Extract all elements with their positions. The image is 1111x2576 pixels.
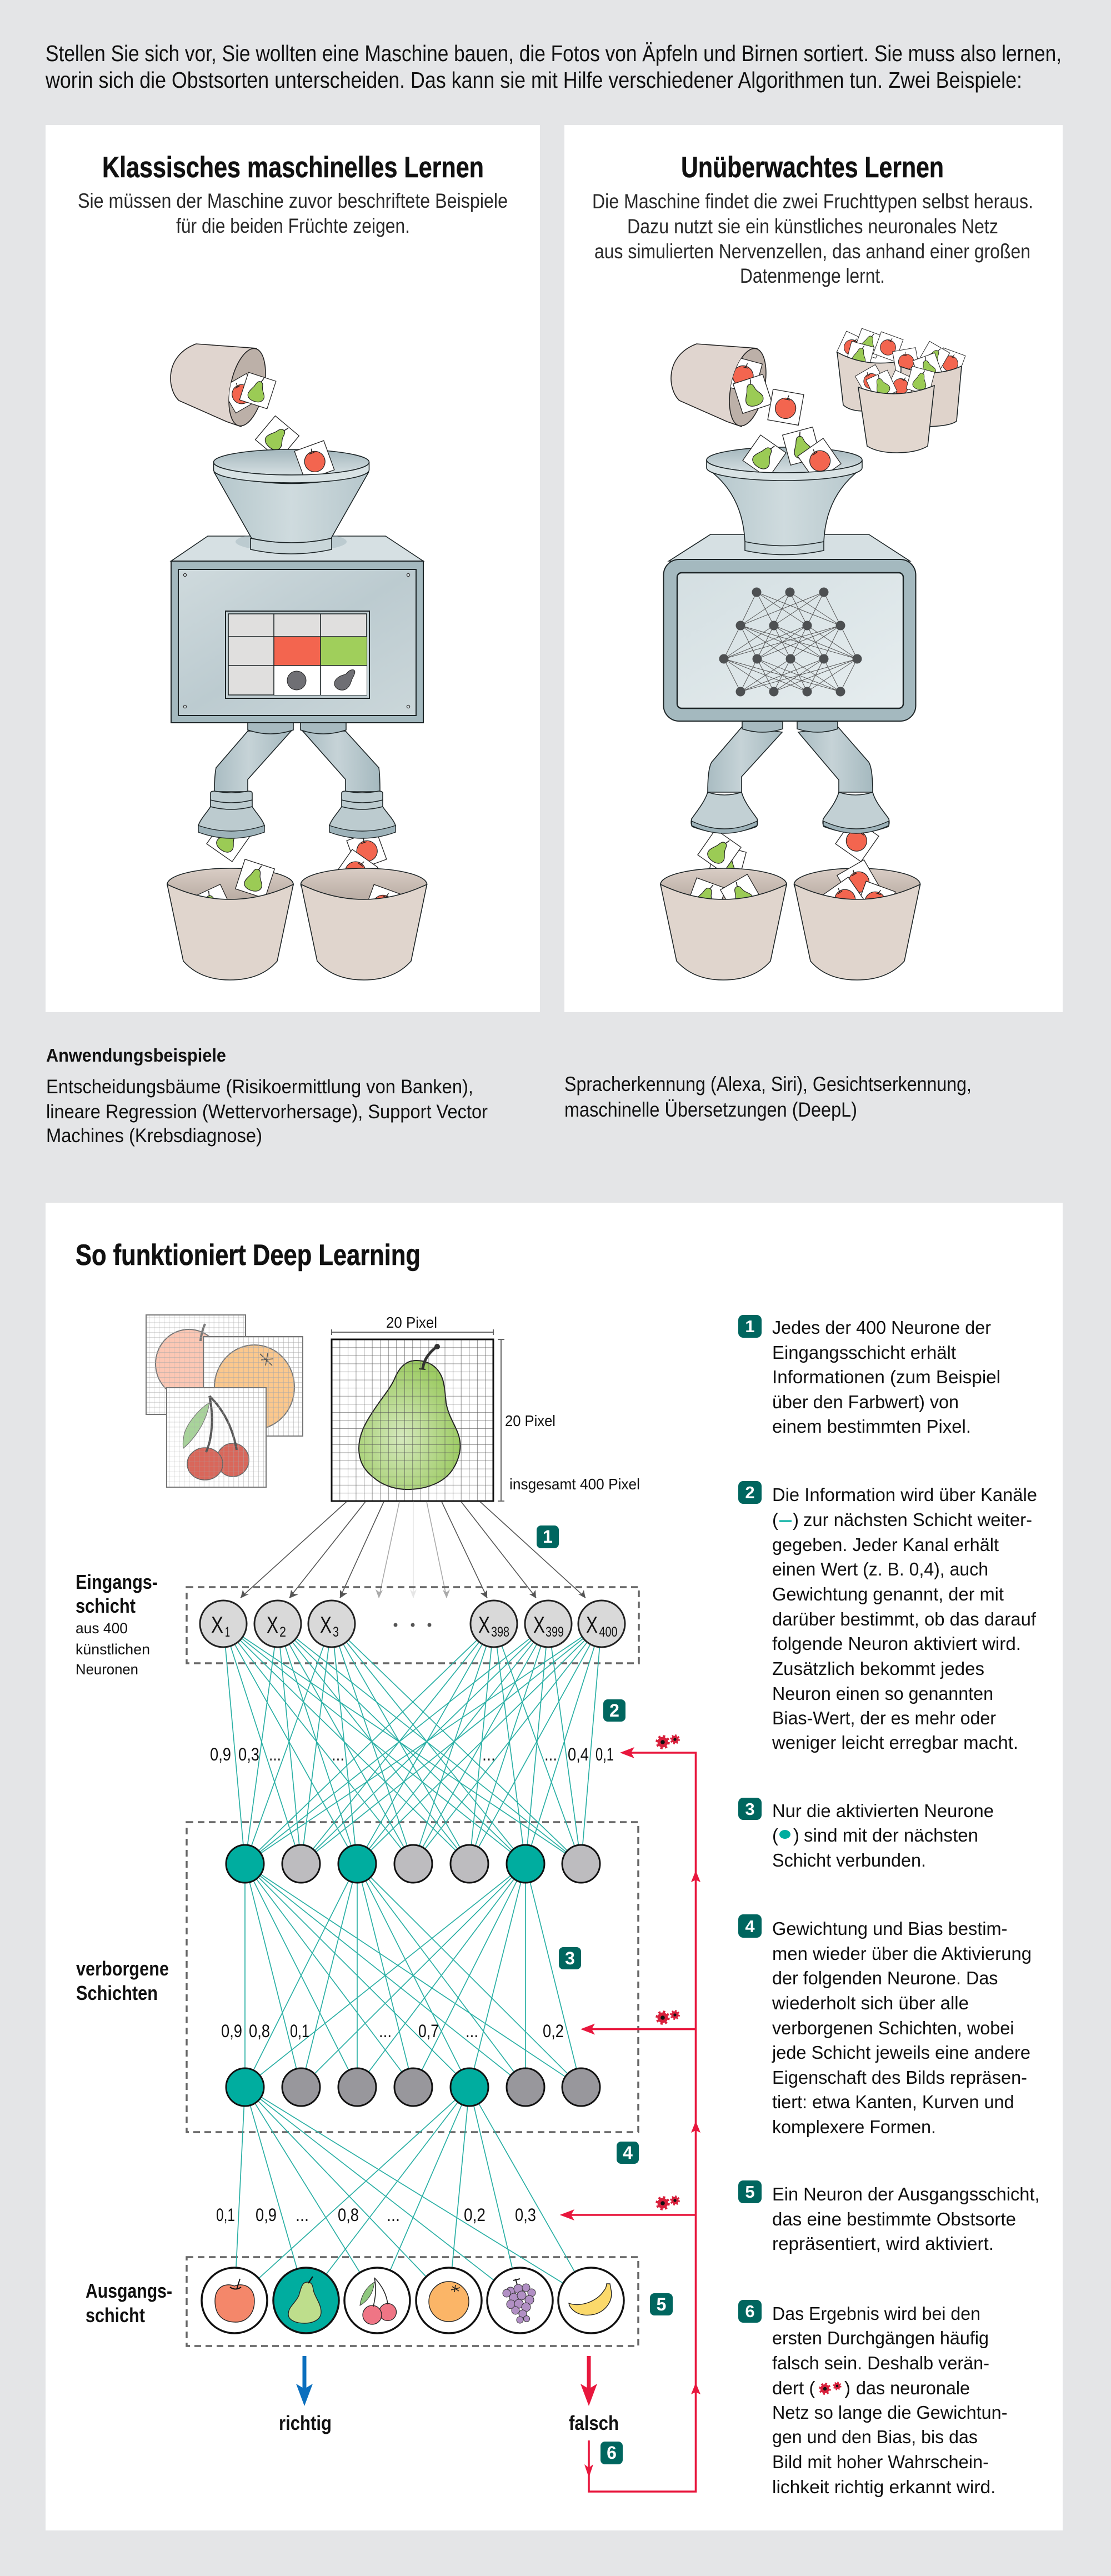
input neurons: 400 — [599, 1624, 618, 1640]
panel: klassisches maschinelles Lernen — [46, 125, 540, 1012]
step 1 text: 1 — [745, 1317, 755, 1336]
weights row 1: ... — [269, 1744, 281, 1764]
image: cherries pixel card — [167, 1388, 266, 1487]
dashed box: input layer — [187, 1587, 639, 1663]
step 3 text: ( — [772, 1825, 778, 1845]
weights row 2: 0,1 — [290, 2021, 309, 2041]
icon: left pipe — [691, 722, 783, 882]
arrow: falsch: falsch — [569, 2412, 619, 2434]
weights row 3: 0,3 — [515, 2205, 536, 2225]
badge 6 diagram — [600, 2442, 623, 2464]
step 3 text: Schicht verbunden. — [772, 1850, 926, 1870]
description: unsupervised learning: Dazu nutzt sie ein künstliches neuronales Netz — [627, 215, 998, 238]
heading: klassisches maschinelles Lernen: Klassisches maschinelles Lernen — [102, 151, 484, 184]
text block: Anwendungsbeispiele classical: Entscheidungsbäume (Risikoermittlung von Banken), — [46, 1076, 473, 1098]
icon: left bucket with pears — [660, 868, 787, 980]
input neurons — [200, 1600, 625, 1647]
icon: gears row 1 — [657, 1735, 679, 1748]
text block: Anwendungsbeispiele unsupervised: Spracherkennung (Alexa, Siri), Gesichtserkennung, — [564, 1073, 972, 1096]
description: classical learning — [78, 189, 508, 237]
step 2 text: 2 — [745, 1483, 755, 1502]
weights row 3: 0,8 — [338, 2205, 359, 2225]
label: verborgene Schichten: Schichten — [76, 1982, 158, 2004]
input neurons: X — [267, 1612, 278, 1638]
input neurons: X — [320, 1612, 332, 1638]
badge 5 diagram: 5 — [657, 2294, 666, 2314]
step 4 text: verborgenen Schichten, wobei — [772, 2018, 1014, 2038]
icon: three full buckets — [837, 328, 965, 453]
icon: falling apple photo — [768, 389, 804, 425]
step 6 text: ) — [844, 2378, 850, 2398]
badge 4 diagram: 4 — [623, 2143, 633, 2163]
badge 3 diagram: 3 — [565, 1948, 575, 1968]
step 6 text: Bild mit hoher Wahrschein- — [772, 2452, 989, 2472]
connections: hidden to output — [234, 2087, 591, 2300]
input neurons: X — [478, 1612, 490, 1638]
step 2 text: Neuron einen so genannten — [772, 1683, 993, 1704]
step 6 text: das neuronale — [856, 2378, 970, 2398]
step 2 text: zur nächsten Schicht weiter- — [803, 1509, 1032, 1530]
step 2 text: Die Information wird über Kanäle — [772, 1484, 1037, 1505]
step 4 text: wiederholt sich über alle — [772, 1993, 969, 2013]
badge 2 diagram: 2 — [609, 1700, 619, 1720]
icon: left bucket with pears — [167, 859, 293, 980]
step 4 text: Eigenschaft des Bilds repräsen- — [772, 2067, 1027, 2088]
step 2 text: Bias-Wert, der es mehr oder — [772, 1708, 996, 1728]
label: Eingangsschicht: aus 400 — [76, 1620, 128, 1637]
step 6 text: gen und den Bias, bis das — [772, 2427, 978, 2447]
description: unsupervised learning: Die Maschine findet die zwei Fruchttypen selbst heraus. — [592, 190, 1033, 213]
heading: unueberwachtes Lernen: Unüberwachtes Lernen — [681, 151, 944, 184]
badge 5 diagram — [650, 2293, 673, 2315]
step 1 text: Eingangsschicht erhält — [772, 1342, 956, 1363]
input neurons: 3 — [333, 1624, 339, 1640]
hidden layer neurons 2 — [226, 2068, 600, 2106]
icon: machine body with table — [171, 536, 423, 723]
step 2 text: Zusätzlich bekommt jedes — [772, 1658, 984, 1679]
step 2 text: einen Wert (z. B. 0,4), auch — [772, 1559, 988, 1579]
badge 4 diagram — [617, 2142, 639, 2164]
description: classical learning: Sie müssen der Maschine zuvor beschriftete Beispiele — [78, 189, 508, 212]
step 5 text: Ein Neuron der Ausgangsschicht, — [772, 2184, 1040, 2204]
weights row 3: 0,1 — [216, 2205, 235, 2225]
dimension: width 20 pixel — [332, 1314, 493, 1335]
step 2 text: ( — [772, 1509, 778, 1530]
input neurons: 2 — [279, 1624, 286, 1640]
label: verborgene Schichten: verborgene — [76, 1957, 169, 1980]
weights row 3: 0,2 — [464, 2205, 486, 2225]
input neurons: X — [211, 1612, 223, 1638]
step 4 text: der folgenden Neurone. Das — [772, 1968, 998, 1988]
step 1 text: einem bestimmten Pixel. — [772, 1416, 971, 1437]
weights row 2: 0,9 — [221, 2021, 242, 2041]
step 4 text: komplexere Formen. — [772, 2117, 936, 2137]
step 4 text: men wieder über die Aktivierung — [772, 1943, 1032, 1964]
image: orange pixel card — [203, 1337, 303, 1436]
arrow: richtig: richtig — [279, 2412, 332, 2434]
step 6 text: Das Ergebnis wird bei den — [772, 2303, 980, 2324]
description: unsupervised learning: Datenmenge lernt. — [740, 264, 885, 287]
text block: Anwendungsbeispiele classical: Anwendungsbeispiele — [46, 1045, 226, 1066]
icon: right bucket with apples — [301, 868, 427, 980]
text block: Anwendungsbeispiele classical: Machines (Krebsdiagnose) — [46, 1125, 262, 1147]
step 6 text: ersten Durchgängen häufig — [772, 2328, 989, 2348]
weights row 1: 0,9 — [210, 1744, 231, 1764]
input neurons: X — [533, 1612, 545, 1638]
input neurons: 399 — [546, 1624, 564, 1640]
step 6 text — [738, 2300, 1008, 2497]
step 4 text — [738, 1914, 1032, 2137]
icon: right bucket with apples — [794, 860, 920, 980]
weights row 3: 0,9 — [256, 2205, 277, 2225]
arrows: pixels to input neurons — [241, 1502, 585, 1598]
text block: Anwendungsbeispiele unsupervised — [564, 1073, 972, 1121]
label: Eingangsschicht — [76, 1570, 158, 1678]
arrow: richtig — [279, 2356, 332, 2434]
step 2 text: Gewichtung genannt, der mit — [772, 1584, 1004, 1604]
description: classical learning: für die beiden Früchte zeigen. — [176, 214, 410, 237]
network lines in machine — [724, 592, 857, 692]
step 2 text: ) — [793, 1509, 799, 1530]
step 5 text: das eine bestimmte Obstsorte — [772, 2209, 1016, 2229]
icon: machine body with neural network — [663, 534, 915, 721]
step 5 text: 5 — [745, 2182, 755, 2202]
arrow: falsch — [569, 2356, 619, 2434]
label: Eingangsschicht: Neuronen — [76, 1661, 138, 1678]
icon: right pipe — [797, 722, 889, 862]
step 6 text: falsch sein. Deshalb verän- — [772, 2353, 989, 2373]
dashed box: hidden layers — [187, 1822, 638, 2132]
step 3 text: sind mit der nächsten — [804, 1825, 978, 1845]
icon: tilted bucket with photos — [171, 344, 276, 429]
input neurons: X — [586, 1612, 598, 1638]
weights row 1: 0,1 — [595, 1744, 614, 1764]
icon: funnel — [213, 441, 369, 554]
icon: gears row 2 — [657, 2011, 679, 2023]
step 2 text: folgende Neuron aktiviert wird. — [772, 1633, 1021, 1654]
output neuron: apple — [202, 2268, 267, 2333]
weights row 2: 0,8 — [249, 2021, 270, 2041]
step 2 text — [738, 1481, 1037, 1753]
weights row 2: ... — [379, 2021, 392, 2041]
icon: tilted bucket with photos — [671, 344, 772, 429]
text block: Anwendungsbeispiele unsupervised: maschinelle Übersetzungen (DeepL) — [564, 1098, 857, 1121]
weights row 2 — [221, 2021, 564, 2041]
weights row 1: 0,3 — [238, 1744, 259, 1764]
weights row 2: ... — [466, 2021, 478, 2041]
step 4 text: jede Schicht jeweils eine andere — [772, 2042, 1030, 2063]
output neuron: banana — [558, 2268, 624, 2333]
step 3 text: 3 — [745, 1799, 755, 1819]
step 2 text: weniger leicht erregbar macht. — [772, 1732, 1018, 1753]
input neurons: 398 — [491, 1624, 509, 1640]
badge 2 diagram — [603, 1699, 625, 1722]
intro text — [45, 41, 1062, 93]
heading: deep learning: So funktioniert Deep Learning — [76, 1239, 421, 1272]
weights row 3: ... — [387, 2205, 400, 2225]
icon: curved funnel — [707, 427, 862, 554]
step 5 text: repräsentiert, wird aktiviert. — [772, 2233, 994, 2254]
step 6 text: 6 — [745, 2302, 755, 2321]
icon: gears row 3 — [657, 2197, 679, 2209]
weights row 1: ... — [544, 1744, 557, 1764]
icon: right pipe — [301, 723, 396, 893]
step 6 text: dert ( — [772, 2378, 815, 2398]
dashed box: output layer — [187, 2257, 638, 2346]
output neuron: grapes — [487, 2268, 553, 2333]
badge 6 diagram: 6 — [607, 2443, 617, 2463]
step 4 text: 4 — [745, 1917, 755, 1936]
weights row 1: ... — [332, 1744, 344, 1764]
label: verborgene Schichten — [76, 1957, 169, 2004]
weights row 1 — [210, 1744, 614, 1764]
step 1 text — [738, 1315, 1000, 1437]
weights row 2: 0,2 — [543, 2021, 564, 2041]
network nodes in machine — [719, 588, 862, 697]
icon: falling pear photo — [256, 416, 299, 459]
text block: Anwendungsbeispiele classical — [46, 1045, 488, 1147]
description: unsupervised learning: aus simulierten Nervenzellen, das anhand einer großen — [594, 240, 1030, 263]
step 1 text: Jedes der 400 Neurone der — [772, 1317, 991, 1338]
output neuron: cherries — [344, 2268, 410, 2333]
step 4 text: Gewichtung und Bias bestim- — [772, 1918, 1008, 1939]
step 4 text: tiert: etwa Kanten, Kurven und — [772, 2092, 1014, 2112]
weights row 1: ... — [482, 1744, 496, 1764]
step 2 text: darüber bestimmt, ob das darauf — [772, 1609, 1037, 1629]
output neuron: pear active — [273, 2268, 339, 2333]
connections: input to first hidden layer — [223, 1624, 602, 1864]
panel: so funktioniert Deep Learning — [46, 1203, 1063, 2530]
input neurons: 1 — [225, 1624, 230, 1640]
description: unsupervised learning — [592, 190, 1033, 287]
dimension: height 20 pixel — [498, 1339, 640, 1501]
weights row 3 — [216, 2205, 536, 2225]
arrows: feedback loop — [560, 1747, 700, 2492]
weights row 2: 0,7 — [418, 2021, 439, 2041]
step 3 text: ) — [793, 1825, 799, 1845]
step 1 text: Informationen (zum Beispiel — [772, 1367, 1000, 1387]
icon: left pipe — [198, 723, 293, 862]
badge 3 diagram — [559, 1947, 581, 1969]
weights row 1: 0,4 — [568, 1744, 589, 1764]
hidden layer neurons 1 — [226, 1845, 600, 1883]
dimension: height 20 pixel: 20 Pixel — [505, 1412, 556, 1429]
label: Eingangsschicht: künstlichen — [76, 1641, 150, 1658]
step 1 text: über den Farbwert) von — [772, 1392, 959, 1412]
panel: unueberwachtes Lernen — [564, 125, 1063, 1012]
label: Eingangsschicht: Eingangs- — [76, 1570, 158, 1593]
dimension: width 20 pixel: 20 Pixel — [386, 1314, 437, 1331]
label: Ausgangsschicht: schicht — [86, 2304, 145, 2327]
weights row 3: ... — [296, 2205, 309, 2225]
label: Eingangsschicht: schicht — [76, 1594, 136, 1617]
image: apple pixel card — [146, 1315, 246, 1414]
label: Ausgangsschicht — [86, 2279, 172, 2327]
step 5 text — [738, 2180, 1040, 2254]
output neuron: orange — [416, 2268, 482, 2333]
step 3 text — [738, 1798, 994, 1870]
text block: Anwendungsbeispiele classical: lineare Regression (Wettervorhersage), Support Vector — [46, 1101, 488, 1123]
connections: hidden to hidden — [245, 1864, 581, 2087]
label: Ausgangsschicht: Ausgangs- — [86, 2279, 172, 2302]
step 6 text: Netz so lange die Gewichtun- — [772, 2402, 1008, 2423]
dimension: height 20 pixel: insgesamt 400 Pixel — [509, 1475, 640, 1493]
step 3 text: Nur die aktivierten Neurone — [772, 1800, 994, 1821]
badge 1 diagram: 1 — [543, 1527, 553, 1547]
step 2 text: gegeben. Jeder Kanal erhält — [772, 1534, 999, 1555]
image: main pear on 20 x 20 pixel grid — [332, 1339, 493, 1501]
badge 1 diagram — [537, 1525, 559, 1548]
step 6 text: lichkeit richtig erkannt wird. — [772, 2477, 995, 2497]
